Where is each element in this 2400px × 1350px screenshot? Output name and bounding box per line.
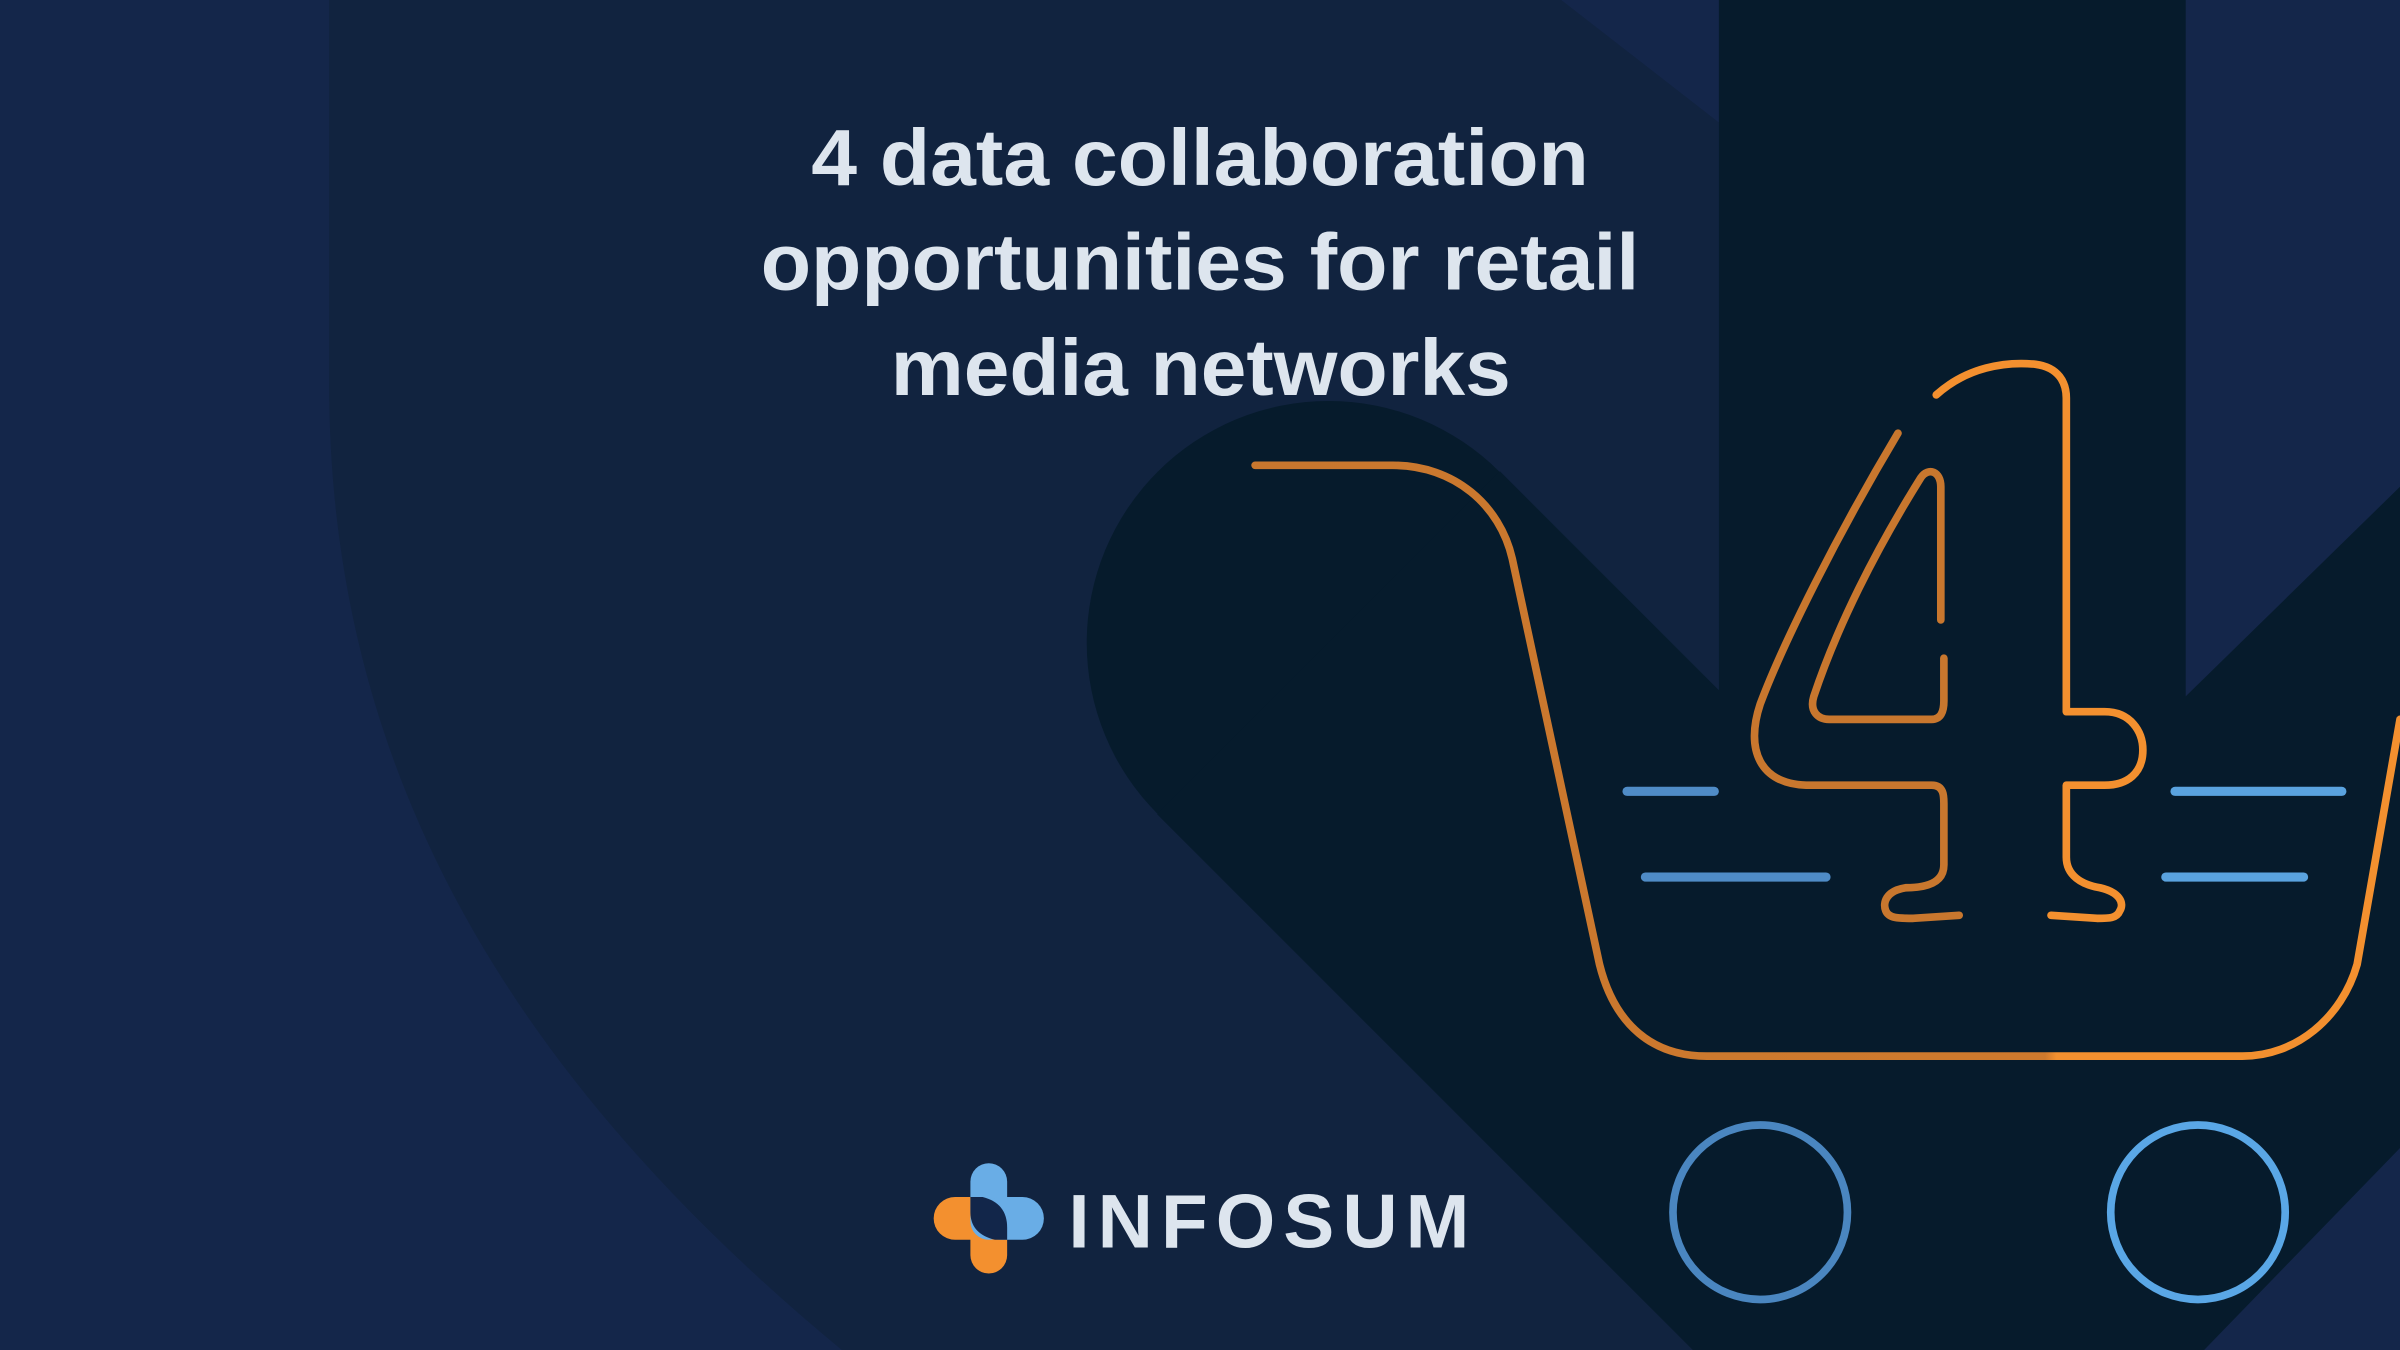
title: opportunities for retail	[761, 217, 1639, 306]
speed lines	[1627, 791, 2342, 877]
title: 4 data collaboration	[811, 113, 1589, 202]
background arc shape	[329, 0, 1719, 1350]
wheels	[1673, 1125, 1847, 1299]
logo	[934, 1163, 1469, 1273]
logo icon	[934, 1163, 1044, 1273]
logo wordmark: INFOSUM	[1068, 1179, 1469, 1264]
illustration: shopping cart with number 4	[1255, 364, 2400, 1299]
cart basket	[1255, 465, 2400, 1056]
dark chevron shape	[1087, 0, 2400, 1350]
title: media networks	[891, 323, 1511, 412]
title	[761, 113, 1639, 412]
number 4	[1754, 364, 2143, 918]
